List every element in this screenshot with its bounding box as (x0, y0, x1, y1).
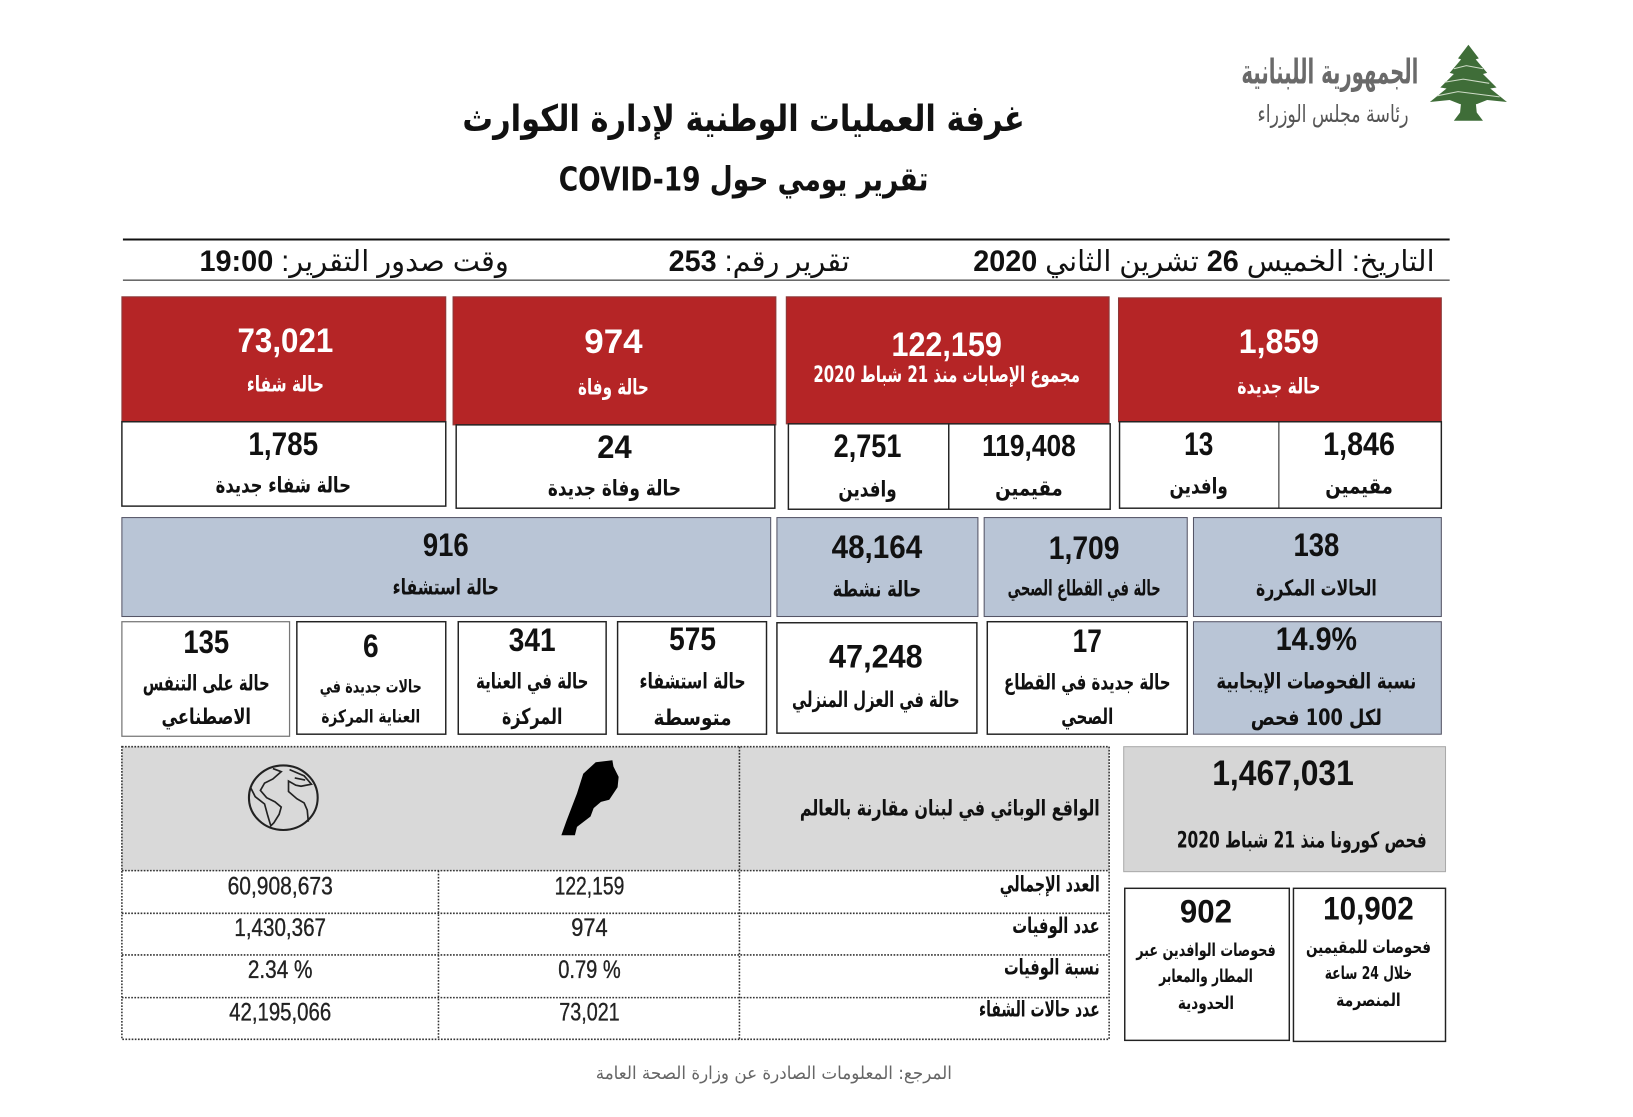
panel: new cases: 1,846 (1323, 426, 1395, 462)
panel: total cases: مقيمين (995, 477, 1063, 502)
panel: home isolation (777, 623, 977, 733)
subtitle: تقرير يومي حول COVID-19 (559, 160, 928, 200)
panel: ventilators: الاصطناعي (161, 705, 251, 730)
panel: total cases: 119,408 (982, 430, 1076, 463)
row: deaths: عدد الوفيات (1012, 914, 1100, 939)
panel: new intensive care: العناية المركزة (321, 708, 420, 728)
row: deaths: 974 (571, 914, 608, 942)
panel: total cases: مجموع الإصابات منذ 21 شباط 2020 (813, 363, 1080, 388)
panel: health sector cases (984, 518, 1187, 617)
panel: intensive care: 341 (509, 622, 556, 658)
panel: arrivals tests: فحوصات الوافدين عبر (1135, 941, 1276, 961)
panel: new intensive care: 6 (363, 628, 379, 664)
row: total (228, 872, 1100, 901)
panel: new cases: 13 (1184, 426, 1213, 462)
panel: deaths: حالة وفاة جديدة (548, 477, 681, 502)
panel: active cases: 48,164 (832, 529, 922, 565)
panel: moderate hospitalised (618, 621, 767, 734)
row: death rate (248, 956, 1100, 984)
row: deaths: 1,430,367 (234, 914, 326, 942)
panel: total cases: 122,159 (891, 326, 1002, 364)
panel: active cases (777, 518, 978, 617)
panel: home isolation: حالة في العزل المنزلي (792, 688, 960, 713)
icon: map of Lebanon (561, 760, 619, 835)
panel: arrivals tests (1125, 888, 1289, 1040)
panel: new health sector cases: حالة جديدة في القطاع (1004, 670, 1171, 695)
panel: repeated cases: الحالات المكررة (1256, 577, 1377, 602)
panel: recoveries: 1,785 (248, 426, 318, 462)
panel: health sector cases: 1,709 (1049, 530, 1120, 566)
panel: repeated cases (1193, 518, 1441, 617)
panel: residents tests: المنصرمة (1336, 991, 1401, 1011)
panel: intensive care (458, 622, 606, 734)
panel: total cases (786, 297, 1110, 509)
panel: moderate hospitalised: 575 (669, 621, 716, 657)
comparison table: Lebanon vs world (122, 747, 1109, 1039)
row: recoveries: 42,195,066 (229, 999, 331, 1027)
panel: new health sector cases: الصحي (1061, 705, 1113, 730)
panel: home isolation: 47,248 (829, 639, 923, 675)
panel: deaths (453, 297, 776, 508)
panel: health sector cases: حالة في القطاع الصحي (1008, 577, 1161, 602)
date: التاريخ: الخميس 26 تشرين الثاني 2020 (973, 246, 1435, 279)
icon: cedar tree (1430, 45, 1507, 121)
panel: positivity rate: لكل 100 فحص (1251, 706, 1382, 731)
panel: recoveries (122, 297, 446, 506)
panel: arrivals tests: 902 (1180, 894, 1232, 930)
row: recoveries: 73,021 (559, 999, 620, 1027)
panel: new cases: مقيمين (1325, 475, 1393, 500)
panel: new health sector cases: 17 (1073, 623, 1102, 659)
panel: total tests (1124, 747, 1446, 872)
row: death rate: نسبة الوفيات (1004, 956, 1100, 981)
panel: active cases: حالة نشطة (833, 578, 921, 603)
panel: moderate hospitalised: متوسطة (654, 706, 732, 731)
icon: globe (249, 765, 318, 830)
panel: new cases: وافدين (1170, 475, 1228, 500)
panel: new intensive care (297, 622, 446, 734)
panel: total tests: فحص كورونا منذ 21 شباط 2020 (1177, 829, 1427, 854)
report time: وقت صدور التقرير: 19:00 (199, 246, 509, 278)
panel: intensive care: حالة في العناية (476, 669, 588, 694)
panel: recoveries: حالة شفاء جديدة (216, 474, 351, 499)
panel: new health sector cases (987, 622, 1187, 734)
panel: repeated cases: 138 (1293, 527, 1339, 563)
panel: residents tests: 10,902 (1323, 891, 1414, 927)
row: total: 60,908,673 (228, 873, 333, 901)
panel: hospitalised: حالة استشفاء (393, 576, 499, 601)
panel: ventilators (122, 622, 290, 736)
panel: new cases (1119, 298, 1441, 508)
panel: total tests: 1,467,031 (1212, 753, 1354, 793)
panel: residents tests: خلال 24 ساعة (1325, 964, 1412, 984)
report number: تقرير رقم: 253 (669, 246, 850, 279)
panel: total cases: وافدين (838, 478, 897, 503)
panel: positivity rate (1193, 621, 1441, 734)
title: غرفة العمليات الوطنية لإدارة الكوارث (462, 97, 1025, 140)
panel: deaths: 974 (584, 323, 643, 361)
panel: deaths: حالة وفاة (578, 376, 649, 401)
source note: المرجع: المعلومات الصادرة عن وزارة الصحة العامة (596, 1064, 952, 1084)
row: deaths (234, 914, 1100, 942)
panel: residents tests (1293, 888, 1446, 1041)
panel: ventilators: حالة على التنفس (143, 671, 270, 696)
panel: total cases: 2,751 (834, 428, 901, 464)
logo text: الجمهورية اللبنانية (1241, 52, 1418, 92)
panel: new intensive care: حالات جديدة في (320, 678, 422, 698)
table heading: الواقع الوبائي في لبنان مقارنة بالعالم (800, 796, 1100, 821)
panel: positivity rate: 14.9% (1276, 621, 1357, 657)
panel: deaths: 24 (597, 429, 632, 465)
panel: hospitalised: 916 (423, 527, 469, 563)
panel: residents tests: فحوصات للمقيمين (1306, 938, 1431, 958)
report info bar (123, 240, 1450, 280)
logo text (1241, 52, 1418, 128)
panel: positivity rate: نسبة الفحوصات الإيجابية (1216, 669, 1416, 694)
row: recoveries: عدد حالات الشفاء (979, 997, 1100, 1022)
panel: ventilators: 135 (183, 624, 229, 660)
panel: moderate hospitalised: حالة استشفاء (639, 669, 746, 694)
panel: intensive care: المركزة (502, 705, 562, 730)
logo text: رئاسة مجلس الوزراء (1258, 100, 1409, 128)
panel: arrivals tests: المطار والمعابر (1158, 967, 1253, 987)
row: death rate: 2.34 % (248, 956, 312, 984)
row: total: 122,159 (555, 873, 624, 901)
row: recoveries (229, 997, 1100, 1027)
panel: new cases: حالة جديدة (1237, 375, 1321, 400)
panel: recoveries: حالة شفاء (247, 373, 324, 398)
panel: hospitalised (122, 518, 771, 617)
panel: arrivals tests: الحدودية (1178, 994, 1234, 1014)
logo: Lebanese Republic, Presidency of the Council of Ministers (1241, 45, 1507, 128)
panel: new cases: 1,859 (1239, 323, 1319, 361)
row: death rate: 0.79 % (558, 956, 621, 984)
panel: recoveries: 73,021 (237, 322, 333, 360)
row: total: العدد الإجمالي (1000, 872, 1100, 897)
